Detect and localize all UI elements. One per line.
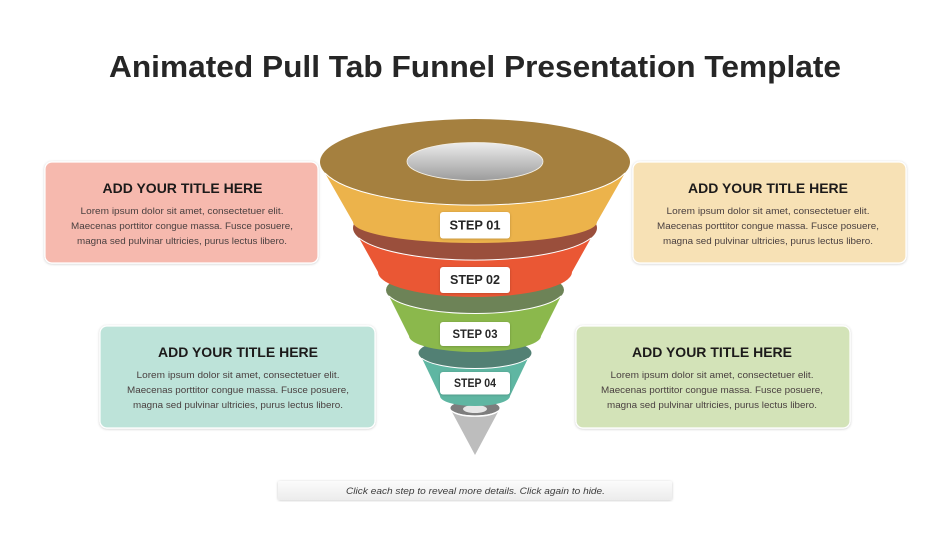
panel: bottom left card <box>100 326 375 428</box>
funnel <box>320 119 630 455</box>
instruction bar <box>278 481 672 500</box>
step 03 label <box>440 322 510 346</box>
funnel step 1 segment <box>325 173 625 243</box>
card heading: ADD YOUR TITLE HERE <box>688 180 848 196</box>
instruction bar: Click each step to reveal more details. Click again to hide. <box>346 486 605 497</box>
card body text: magna sed pulvinar ultricies, purus lectus libero. <box>663 236 873 247</box>
card body text: Lorem ipsum dolor sit amet, consectetuer elit. <box>666 206 870 217</box>
card heading: ADD YOUR TITLE HERE <box>158 344 318 360</box>
card body text: magna sed pulvinar ultricies, purus lectus libero. <box>77 236 287 247</box>
card heading: ADD YOUR TITLE HERE <box>632 344 792 360</box>
funnel rim highlight <box>325 173 625 205</box>
step 01 label: STEP 01 <box>450 218 501 232</box>
card body text: Lorem ipsum dolor sit amet, consectetuer elit. <box>136 370 340 381</box>
panel: top left card <box>45 162 318 263</box>
card body text: Maecenas porttitor congue massa. Fusce posuere, <box>71 221 293 232</box>
title: Animated Pull Tab Funnel Presentation Template <box>109 49 841 84</box>
funnel step 3 segment <box>386 266 564 352</box>
funnel step 2 segment <box>353 196 597 297</box>
funnel step 4 segment <box>418 338 532 406</box>
funnel opening <box>407 142 543 180</box>
card body text <box>601 370 823 411</box>
card body text: magna sed pulvinar ultricies, purus lectus libero. <box>607 400 817 411</box>
step 02 label <box>440 267 510 293</box>
card body text <box>71 206 293 247</box>
panel: top right card <box>633 162 906 263</box>
card body text: magna sed pulvinar ultricies, purus lectus libero. <box>133 400 343 411</box>
card body text <box>657 206 879 247</box>
card body text: Maecenas porttitor congue massa. Fusce posuere, <box>657 221 879 232</box>
step 04 label: STEP 04 <box>454 378 497 390</box>
card heading: ADD YOUR TITLE HERE <box>102 180 262 196</box>
step 01 label <box>440 212 510 238</box>
step 03 label: STEP 03 <box>452 329 498 341</box>
card body text <box>127 370 349 411</box>
card body text: Lorem ipsum dolor sit amet, consectetuer elit. <box>610 370 814 381</box>
card body text: Maecenas porttitor congue massa. Fusce posuere, <box>127 385 349 396</box>
panel: bottom right card <box>576 326 850 428</box>
step 02 label: STEP 02 <box>450 273 500 287</box>
card body text: Maecenas porttitor congue massa. Fusce posuere, <box>601 385 823 396</box>
funnel tip cone <box>450 400 500 455</box>
funnel top rim <box>320 119 630 205</box>
card body text: Lorem ipsum dolor sit amet, consectetuer elit. <box>80 206 284 217</box>
step 04 label <box>440 372 510 394</box>
